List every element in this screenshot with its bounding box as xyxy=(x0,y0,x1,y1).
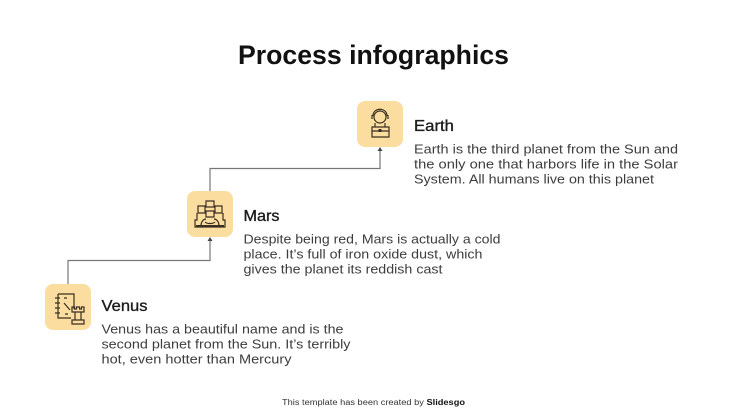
arrow: Venus to Mars xyxy=(68,237,212,284)
text: Earth description: the only one that harbors life in the Solar xyxy=(414,157,679,172)
text: Earth description: Earth is the third planet from the Sun and xyxy=(414,142,678,157)
step: Earth xyxy=(357,101,679,187)
title: Process infographics xyxy=(238,40,509,70)
text: Mars description: gives the planet its reddish cast xyxy=(244,262,443,276)
text: Venus description: second planet from the Sun. It’s terribly xyxy=(102,337,351,352)
icon: group of people on a sofa xyxy=(187,191,233,237)
heading: Earth: Earth xyxy=(414,118,454,135)
heading: Venus: Venus xyxy=(102,298,148,315)
text: Venus description xyxy=(102,322,351,367)
step: Mars xyxy=(187,191,500,276)
text: Mars description: Despite being red, Mars is actually a cold xyxy=(244,232,500,246)
heading: Mars: Mars xyxy=(244,208,280,225)
text: Venus description: hot, even hotter than Mercury xyxy=(102,352,292,367)
arrow: Mars to Earth xyxy=(210,147,382,191)
text: Mars description: place. It’s full of iron oxide dust, which xyxy=(244,246,482,262)
text: Earth description xyxy=(414,142,679,187)
footer credit: This template has been created by Slidesgo xyxy=(282,398,465,407)
text: Earth description: System. All humans live on this planet xyxy=(414,172,654,187)
text: Venus description: Venus has a beautiful name and is the xyxy=(102,322,344,337)
icon: person with headset and laptop xyxy=(357,101,403,147)
step: Venus xyxy=(45,284,351,367)
text: Mars description xyxy=(244,232,500,276)
icon: strategy board with chess rook xyxy=(45,284,91,330)
